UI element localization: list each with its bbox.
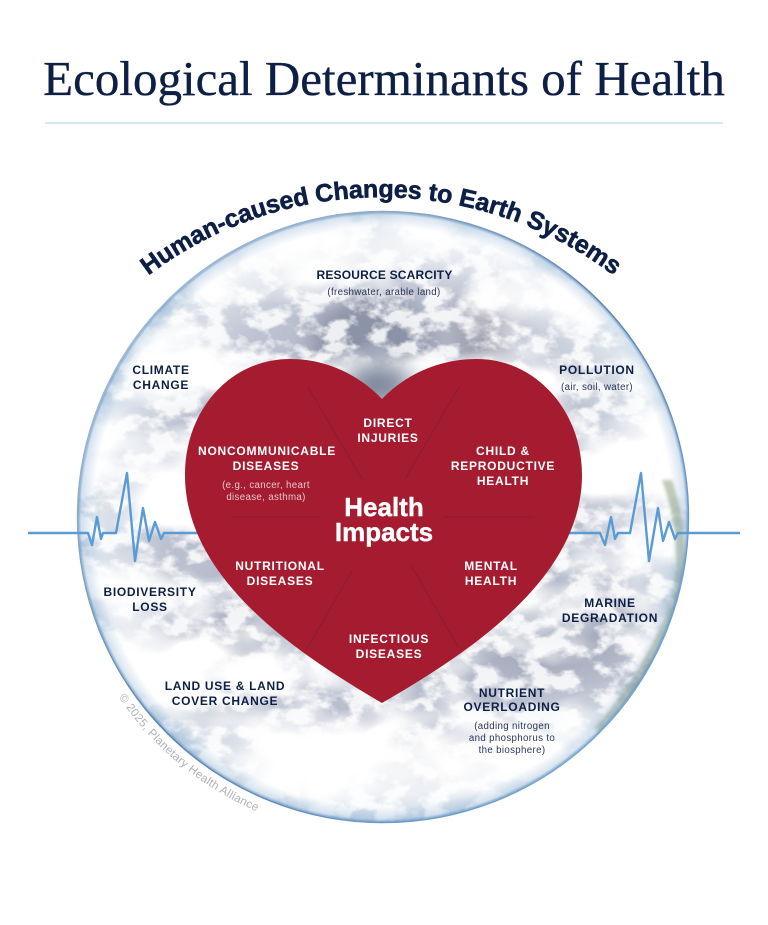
label: marine degradation: MARINE bbox=[584, 596, 636, 610]
label: mental health: MENTAL bbox=[464, 559, 518, 573]
label: nutrient overloading: NUTRIENT bbox=[479, 686, 545, 700]
label: land use and land cover change: LAND USE & LAND bbox=[165, 679, 285, 693]
heart dividers bbox=[233, 387, 534, 647]
label: nutrient overloading bbox=[463, 686, 561, 756]
label: direct injuries bbox=[357, 416, 419, 445]
label: noncommunicable diseases: NONCOMMUNICABLE bbox=[198, 444, 336, 458]
label: land use and land cover change: COVER CHANGE bbox=[172, 694, 278, 708]
label: direct injuries: INJURIES bbox=[357, 431, 419, 445]
label: pollution: (air, soil, water) bbox=[561, 382, 633, 393]
label: infectious diseases: DISEASES bbox=[356, 647, 422, 661]
label: child and reproductive health: CHILD & bbox=[476, 444, 530, 458]
label: noncommunicable diseases: disease, asthma) bbox=[226, 492, 306, 503]
heartbeat line left bbox=[28, 473, 200, 561]
label: nutritional diseases: DISEASES bbox=[247, 574, 313, 588]
label: climate change: CLIMATE bbox=[132, 363, 190, 377]
title divider bbox=[45, 122, 723, 124]
copyright: © 2025, Planetary Health Alliance bbox=[120, 694, 258, 810]
title: Ecological Determinants of Health bbox=[43, 51, 725, 106]
label: resource scarcity bbox=[316, 268, 453, 298]
label: marine degradation: DEGRADATION bbox=[562, 611, 658, 625]
arc heading: Human-caused Changes to Earth Systems bbox=[139, 181, 620, 275]
label: noncommunicable diseases: DISEASES bbox=[233, 459, 299, 473]
label: climate change: CHANGE bbox=[133, 378, 189, 392]
label: pollution bbox=[559, 363, 635, 393]
heart panel bbox=[185, 359, 582, 703]
label: nutrient overloading: (adding nitrogen bbox=[474, 721, 550, 732]
label: resource scarcity: RESOURCE SCARCITY bbox=[316, 268, 453, 282]
centre heading: health impacts bbox=[335, 492, 433, 547]
label: infectious diseases bbox=[349, 632, 429, 661]
label: nutrient overloading: the biosphere) bbox=[479, 745, 545, 756]
label: nutritional diseases bbox=[235, 559, 325, 588]
label: biodiversity loss: BIODIVERSITY bbox=[103, 585, 197, 599]
earth globe bbox=[70, 205, 700, 830]
label: child and reproductive health bbox=[451, 444, 555, 488]
label: biodiversity loss bbox=[103, 585, 197, 614]
label: nutrient overloading: OVERLOADING bbox=[463, 700, 561, 714]
label: noncommunicable diseases: (e.g., cancer, heart bbox=[222, 480, 310, 491]
label: mental health: HEALTH bbox=[465, 574, 517, 588]
label: biodiversity loss: LOSS bbox=[132, 600, 168, 614]
label: marine degradation bbox=[562, 596, 658, 625]
label: land use and land cover change bbox=[165, 679, 285, 708]
label: child and reproductive health: REPRODUCTIVE bbox=[451, 459, 555, 473]
label: nutrient overloading: and phosphorus to bbox=[469, 733, 555, 744]
label: child and reproductive health: HEALTH bbox=[477, 474, 529, 488]
label: mental health bbox=[464, 559, 518, 588]
label: resource scarcity: (freshwater, arable land) bbox=[327, 287, 441, 298]
heartbeat line right bbox=[565, 473, 740, 561]
label: climate change bbox=[132, 363, 190, 392]
label: nutritional diseases: NUTRITIONAL bbox=[235, 559, 325, 573]
label: noncommunicable diseases bbox=[198, 444, 336, 503]
centre heading: health impacts: Health bbox=[344, 492, 424, 522]
label: direct injuries: DIRECT bbox=[363, 416, 413, 430]
label: infectious diseases: INFECTIOUS bbox=[349, 632, 429, 646]
centre heading: health impacts: Impacts bbox=[335, 517, 433, 547]
label: pollution: POLLUTION bbox=[559, 363, 635, 377]
